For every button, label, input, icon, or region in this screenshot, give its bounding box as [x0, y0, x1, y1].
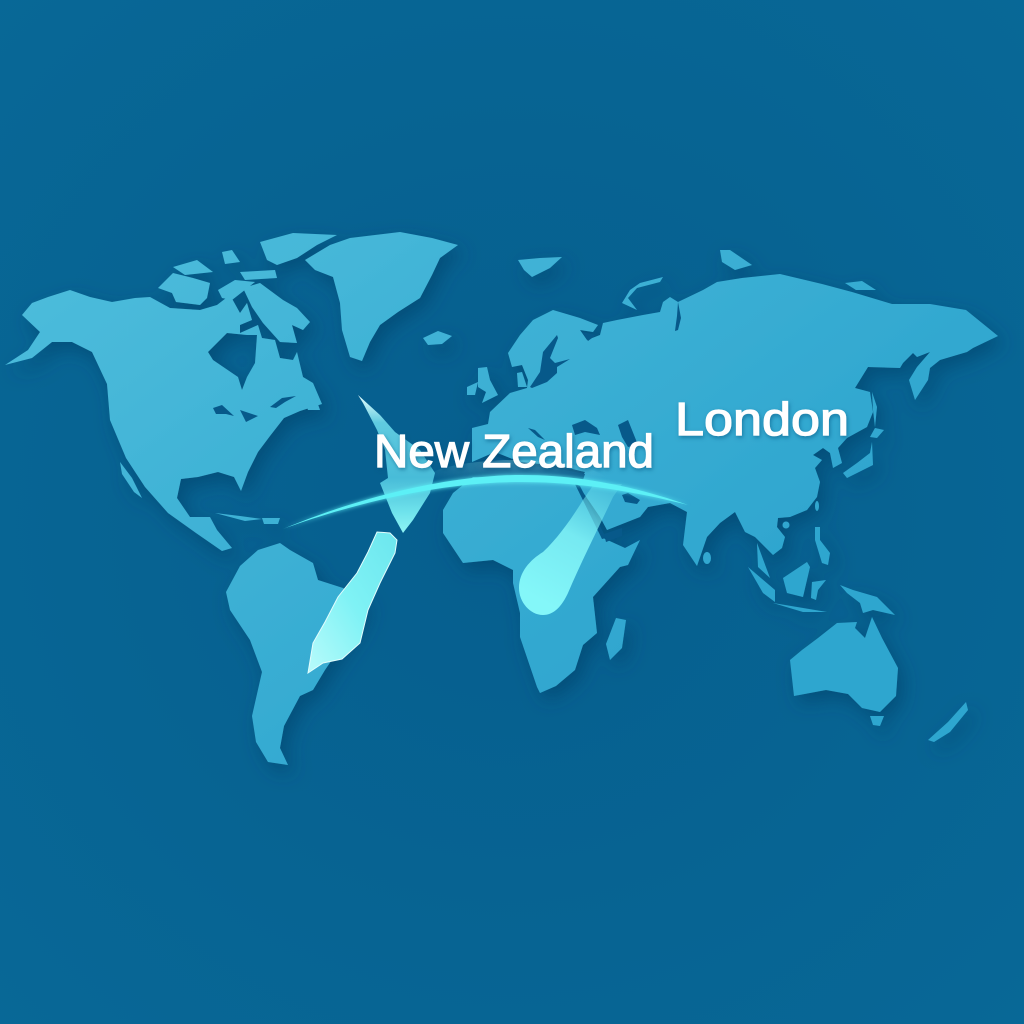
- Gulf of St Lawrence: [270, 396, 296, 408]
- Africa: [443, 477, 640, 693]
- New Siberian Islands: [845, 281, 876, 290]
- North America: [5, 290, 322, 551]
- Red Sea: [575, 484, 606, 539]
- Caribbean islands: [215, 513, 280, 524]
- Philippines: [815, 527, 830, 565]
- Newfoundland: [305, 396, 320, 410]
- label: London: London: [675, 393, 849, 445]
- Sumatra: [748, 567, 775, 602]
- Novaya Zemlya: [622, 277, 663, 310]
- Svalbard: [518, 257, 562, 277]
- teardrop pin: [519, 484, 622, 615]
- Java: [773, 603, 827, 612]
- Madagascar: [606, 618, 626, 660]
- New Zealand small: [928, 702, 968, 742]
- Arctic islands: [158, 233, 337, 343]
- Sulawesi: [811, 580, 826, 600]
- Taiwan: [815, 501, 819, 511]
- Greenland: [305, 232, 458, 361]
- Ireland: [467, 382, 478, 395]
- inland seas and lakes: [213, 302, 681, 542]
- New Guinea: [840, 585, 895, 615]
- Mediterranean Sea: [474, 456, 585, 480]
- Borneo: [783, 562, 810, 597]
- Australia: [790, 617, 898, 712]
- Baltic Sea: [530, 335, 570, 388]
- Persian Gulf: [622, 493, 640, 504]
- White Sea detail: [582, 332, 596, 341]
- Tasmania: [870, 716, 884, 726]
- Great Lakes: [213, 405, 258, 422]
- Hainan: [782, 522, 790, 528]
- South America: [226, 543, 366, 765]
- Hokkaido: [870, 428, 884, 438]
- bright glow under arc: [420, 460, 610, 508]
- Sakhalin: [872, 392, 877, 427]
- Denmark: [517, 372, 527, 387]
- Severnaya Zemlya: [720, 250, 752, 270]
- Sri Lanka: [703, 552, 711, 564]
- Baja California: [120, 462, 142, 498]
- Gulf of Aden: [604, 528, 622, 542]
- Caspian Sea: [618, 420, 638, 447]
- bright New Zealand north island shape: [358, 395, 435, 533]
- Honshu: [843, 442, 873, 478]
- Malay peninsula: [757, 543, 770, 578]
- Great Britain: [478, 367, 498, 403]
- flight arc: [283, 475, 688, 529]
- label: New Zealand: New Zealand: [374, 425, 654, 477]
- world map: [5, 232, 998, 765]
- Eurasia: [472, 274, 998, 566]
- Black Sea: [572, 420, 600, 435]
- bright New Zealand south island shape: [308, 532, 397, 673]
- Adriatic Sea: [528, 428, 545, 440]
- Ob gulf: [675, 302, 681, 331]
- Iceland: [423, 331, 452, 345]
